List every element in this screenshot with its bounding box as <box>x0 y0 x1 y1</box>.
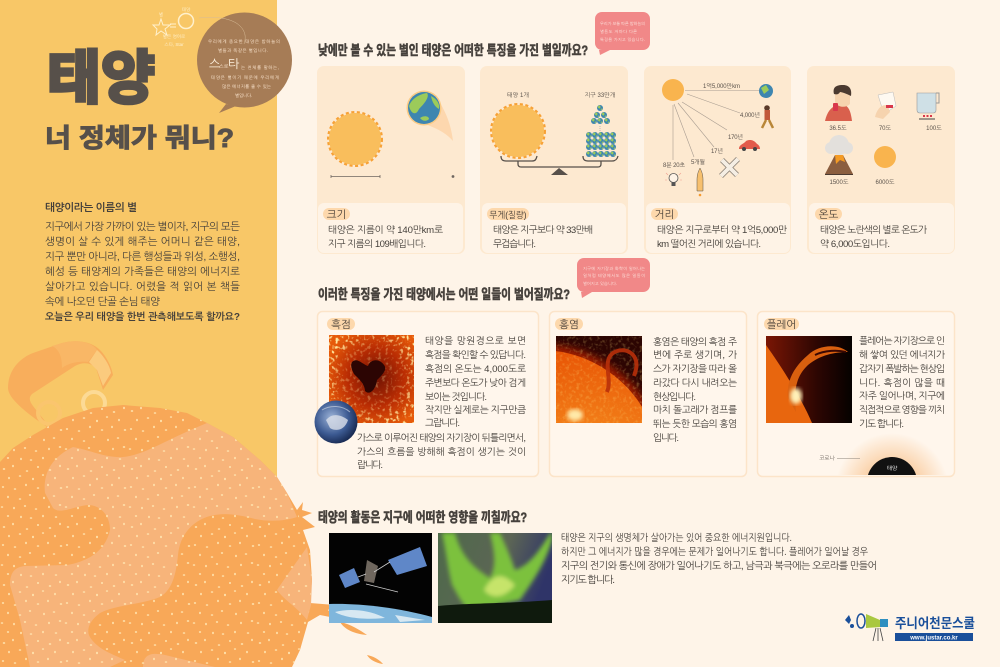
text block: intro <box>45 202 240 323</box>
tag: 홍염 <box>559 319 579 331</box>
heading: section 2: 이러한 특징을 가진 태양에서는 어떤 일들이 벌어질까요? <box>318 287 570 302</box>
callout: pink bubble 2: 벌어지고 있습니다. <box>583 281 617 286</box>
tag: 크기 <box>327 209 346 221</box>
arrows to the sun <box>673 90 759 160</box>
diagram: corona: 태양 <box>887 465 898 472</box>
photo: aurora <box>438 530 552 623</box>
description: 마치 돌고래가 점프를 <box>653 405 737 416</box>
callout: pink bubble 2: 지구에 자기장과 화학이 일어나는 <box>583 266 645 271</box>
callout: pink bubble 1 <box>595 12 650 55</box>
text block: intro: 오늘은 우리 태양을 한번 관측해보도록 할까요? <box>45 311 240 323</box>
photo: sunspot <box>329 335 414 423</box>
diagram: corona: 코로나 <box>819 455 836 462</box>
description: 주변보다 온도가 낮아 검게 <box>425 378 526 389</box>
callout: brown speech bubble: 별입니다. <box>235 93 252 98</box>
text block: earth impact: 태양은 지구의 생명체가 살아가는 있어 중요한 에너지원입니다. <box>561 532 792 544</box>
subtitle: 너 정체가 뭐니? <box>45 123 234 153</box>
description: 보이는 것입니다. <box>425 392 487 403</box>
description: 니다. 흑점이 많을 때 <box>859 378 945 389</box>
title: 태양: 태양 <box>47 46 155 111</box>
text block: earth impact: 하지만 그 에너지가 많을 경우에는 문제가 일어나기도 합니다. 플레어가 일어날 경우 <box>561 546 869 558</box>
panel: flare <box>756 310 956 478</box>
description: 직접적으로 영향을 끼치 <box>859 404 945 416</box>
photo: flare <box>766 336 852 423</box>
distance labels: 17년 <box>711 148 723 155</box>
icon: earth with zoom cone <box>406 90 453 141</box>
tag <box>815 208 842 221</box>
tag: 거리 <box>655 209 674 221</box>
description: 가스로 이루어진 태양의 자기장이 뒤틀리면서, <box>357 433 526 444</box>
description <box>493 224 593 250</box>
description <box>859 336 946 430</box>
callout: pink bubble 2: 일처럼 태양에서도 많은 일들이 <box>583 273 645 278</box>
labels: 지구 33만개 <box>585 92 616 99</box>
description: 태양을 망원경으로 보면 <box>425 336 526 347</box>
star sketch note: 태양 <box>182 7 191 12</box>
description <box>357 336 526 471</box>
description: 작지만 실제로는 지구만큼 <box>425 404 526 416</box>
photo: earth <box>314 400 358 444</box>
description: 가스의 흐름을 방해해 흑점이 생기는 것이 <box>357 447 526 458</box>
distance labels: 4,000년 <box>740 112 760 119</box>
tag: 흑점 <box>331 319 351 331</box>
callout: pink bubble 1: 별들도 저마다 다른 <box>600 29 637 34</box>
text block: intro: 지구 뿐만 아니라, 다른 행성들과 위성, 소행성, <box>45 251 240 263</box>
description: 그랍니다. <box>425 418 460 429</box>
temperature labels <box>829 125 942 186</box>
description: 태양은 지름이 약 140만km로 <box>328 224 443 236</box>
description <box>820 225 928 250</box>
text block: earth impact: 지기도 합니다. <box>561 574 615 586</box>
temperature labels: 70도 <box>879 125 892 132</box>
callout: pink bubble 2 <box>577 258 650 298</box>
icon: sun <box>328 112 382 166</box>
description: 약 6,000도입니다. <box>820 238 890 250</box>
distance labels: 5개월 <box>691 159 705 166</box>
glasses <box>38 392 105 424</box>
panel: distance <box>644 66 791 254</box>
icon: earth <box>759 84 773 98</box>
description: 흑점의 온도는 4,000도로 <box>425 364 526 375</box>
description: 해 쌓여 있던 에너지가 <box>859 350 946 361</box>
panel: size <box>317 66 465 254</box>
icon: sun <box>662 79 684 101</box>
callout: brown speech bubble: 태양은 별이기 때문에 우리에게 <box>211 75 279 80</box>
distance labels <box>663 83 760 169</box>
panel: temperature <box>807 66 955 254</box>
tag: 무게(질량) <box>490 210 526 220</box>
photo: prominence <box>556 336 642 423</box>
description: 플레어는 자기장으로 인 <box>859 336 945 347</box>
tag <box>327 318 355 331</box>
text block: intro: 지구에서 가장 가까이 있는 별이자, 지구의 모든 <box>45 221 240 233</box>
description: 태양은 노란색의 별로 온도가 <box>820 225 928 236</box>
tag: 플레어 <box>767 319 796 331</box>
tag <box>323 208 350 221</box>
panel: sunspot <box>314 312 538 476</box>
callout: brown speech bubble: 스로 <box>219 64 229 70</box>
description: 자주 일어나며, 지구에 <box>859 391 945 402</box>
labels: 태양 1개 <box>507 92 529 99</box>
description <box>653 337 738 444</box>
description: 지구 지름의 109배입니다. <box>328 239 426 250</box>
description: km 떨어진 거리에 있습니다. <box>657 239 761 250</box>
scale bars <box>331 175 454 178</box>
description: 무겁습니다. <box>493 239 536 250</box>
heading: section 1: 낮에만 볼 수 있는 별인 태양은 어떠한 특징을 가진 별일까요? <box>318 43 588 58</box>
tag <box>555 318 583 331</box>
distance labels: 8분 20초 <box>663 162 685 169</box>
text block: intro: 혜성 등 태양계의 가족들은 태양의 에너지로 <box>45 266 240 278</box>
light patches <box>10 423 297 667</box>
left yellow panel <box>0 0 277 667</box>
description: 라갔다 다시 내려오는 <box>653 378 737 389</box>
description: 입니다. <box>653 433 679 444</box>
icon: walking person <box>762 105 773 128</box>
panel: prominence <box>548 310 748 478</box>
icon: stacked earths <box>586 105 616 157</box>
callout: pink bubble 1: 우리가 보통 따른 밤하늘의 <box>600 21 645 26</box>
tag <box>651 208 678 221</box>
icon: car <box>739 140 760 151</box>
description: 태양은 지구보다 약 33만배 <box>493 224 593 236</box>
text block: earth impact <box>561 532 877 586</box>
labels <box>507 92 616 99</box>
heading: section 3: 태양의 활동은 지구에 어떠한 영향을 끼칠까요? <box>318 510 527 525</box>
icon: telescope <box>845 614 888 641</box>
description: 태양은 지구로부터 약 1억5,000만 <box>657 224 788 236</box>
sun body <box>0 405 335 667</box>
description <box>657 224 788 250</box>
icon: pot on stove <box>917 93 939 119</box>
hair <box>8 341 113 427</box>
callout: pink bubble 1: 특징을 가지고 있습니다. <box>600 37 645 42</box>
illustration: sun character with hair and glasses <box>0 341 383 667</box>
text block: intro: 살아가고 있습니다. 어렸을 적 읽어 본 책들 <box>45 281 240 293</box>
speckles <box>0 405 312 667</box>
callout: brown speech bubble <box>197 12 292 113</box>
callout: brown speech bubble: 별들과 똑같은 별입니다. <box>218 48 268 53</box>
star sketch note: 별은 영어로 <box>163 34 186 39</box>
description: 홍염은 태양의 흑점 주 <box>653 337 737 348</box>
callout: brown speech bubble: 스 <box>209 57 220 71</box>
distance labels: 170년 <box>728 134 743 141</box>
description: 뛰는 듯한 모습의 홍염 <box>653 419 737 430</box>
flying flares <box>340 622 383 664</box>
panel: mass <box>480 66 628 254</box>
temperature labels: 100도 <box>926 125 942 132</box>
description: 흑점을 확인할 수 있답니다. <box>425 350 526 361</box>
description: 랍니다. <box>357 460 383 471</box>
icon: light bulb <box>665 173 682 186</box>
callout: brown speech bubble: 우리에게 중요한 태양은 밤하늘의 <box>208 39 280 44</box>
callout: brown speech bubble: 타 <box>228 57 239 71</box>
description: 변에 주로 생기며, 가 <box>653 350 738 361</box>
logo: junior astronomy school <box>845 614 975 642</box>
star sketch note: 별 <box>159 12 163 17</box>
icon: sun <box>492 104 544 158</box>
photo: satellite over earth <box>329 533 432 623</box>
description: 갑자기 폭발하는 현상입 <box>859 363 945 375</box>
temperature labels: 1500도 <box>830 179 849 186</box>
diagram: corona <box>819 436 943 475</box>
description <box>328 224 443 250</box>
description: 현상입니다. <box>653 391 696 403</box>
tag: 온도 <box>819 209 838 221</box>
callout: brown speech bubble: 는 천체를 말하는, <box>241 65 279 70</box>
icon: rocket <box>697 168 703 196</box>
icon: sun <box>874 146 896 168</box>
star sketch note <box>153 7 194 47</box>
icon: airplane <box>721 159 738 176</box>
description: 기도 합니다. <box>859 419 904 430</box>
callout: brown speech bubble: 많은 에너지를 줄 수 있는 <box>222 84 271 89</box>
balance scale <box>501 156 618 175</box>
temperature labels: 6000도 <box>876 179 895 186</box>
text block: intro: 생명이 살 수 있게 해주는 어머니 같은 태양, <box>45 236 240 248</box>
star sketch note: 스타, Star <box>164 42 184 47</box>
icon: volcano <box>825 135 853 174</box>
text block: intro: 속에 나오던 단골 손님 태양 <box>45 296 160 308</box>
distance labels: 1억5,000만km <box>703 83 740 90</box>
text block: intro: 태양이라는 이름의 별 <box>45 202 137 214</box>
logo: junior astronomy school: www.justar.co.kr <box>909 636 958 642</box>
text block: earth impact: 지구의 전기와 통신에 장애가 일어나기도 하고, 남극과 북극에는 오로라를 만들어 <box>561 560 877 572</box>
temperature labels: 36.5도 <box>829 125 847 132</box>
description: 스가 자기장을 따라 올 <box>653 364 737 375</box>
logo: junior astronomy school: 주니어천문스쿨 <box>895 616 975 631</box>
icon: person with thermometer <box>825 85 852 121</box>
icon: hand with paper <box>875 92 896 119</box>
